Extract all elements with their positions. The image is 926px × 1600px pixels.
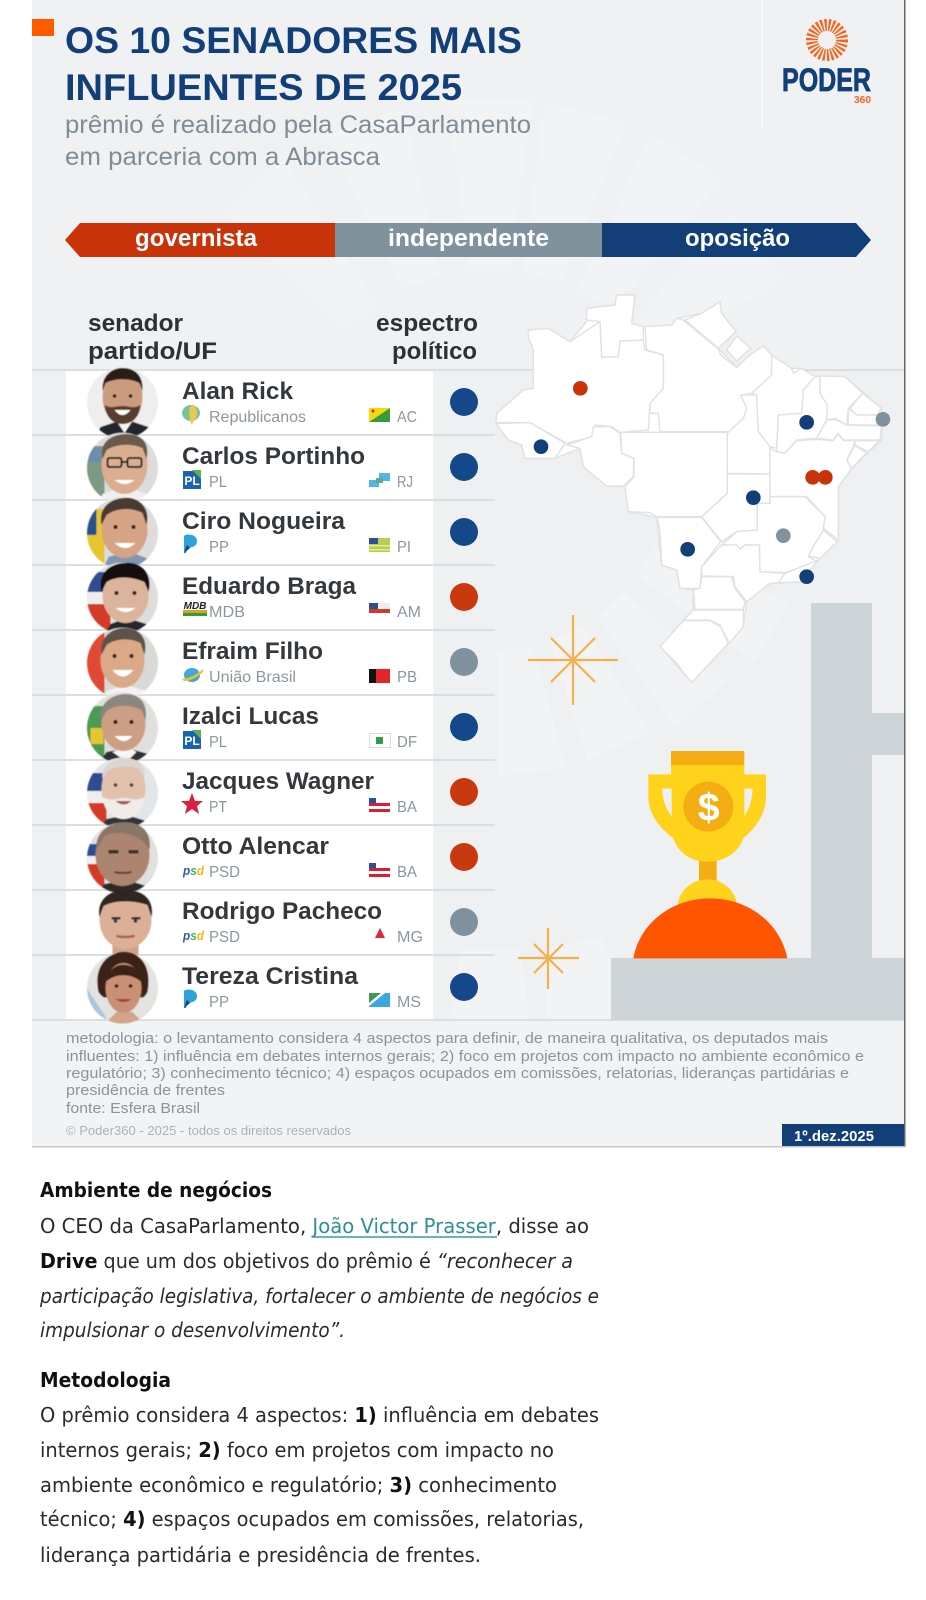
flag: Acre — [369, 408, 390, 422]
spectrum dot — [450, 973, 478, 1001]
name: Jacques Wagner — [182, 768, 374, 795]
logo: Poder360: 360 — [854, 95, 871, 106]
row: Otto Alencar — [86, 822, 478, 894]
flag: Distrito Federal — [370, 734, 390, 748]
paragraph: O CEO da CasaParlamento, João Victor Prasser, disse ao — [40, 1214, 589, 1238]
spectrum dot — [450, 713, 478, 741]
heading: Metodologia — [40, 1368, 171, 1392]
row: Eduardo Braga — [86, 562, 478, 634]
party: PT — [209, 799, 227, 816]
spectrum dot — [450, 583, 478, 611]
party logo: PP — [184, 989, 197, 1008]
paragraph: participação legislativa, fortalecer o ambiente de negócios e — [39, 1284, 599, 1308]
spectrum dot — [450, 908, 478, 936]
spectrum dot — [450, 648, 478, 676]
state: MG — [397, 929, 423, 946]
spectrum dot — [450, 518, 478, 546]
paragraph: liderança partidária e presidência de frentes. — [40, 1543, 481, 1567]
methodology note: presidência de frentes — [66, 1082, 225, 1099]
party logo: PP — [184, 534, 197, 553]
photo: Otto Alencar — [86, 822, 158, 894]
map of Brazil — [496, 295, 890, 683]
name: Ciro Nogueira — [182, 508, 346, 535]
photo: Carlos Portinho — [86, 432, 158, 504]
state: BA — [397, 799, 417, 816]
state: MS — [397, 994, 421, 1011]
photo: Eduardo Braga — [86, 562, 158, 634]
party: PP — [209, 539, 229, 556]
party logo: PSD: psd — [182, 863, 205, 878]
methodology note — [66, 1030, 864, 1117]
flag: Bahia — [369, 863, 390, 877]
paragraph: ambiente econômico e regulatório; 3) conhecimento — [40, 1473, 557, 1497]
party logo: PL: PL — [184, 734, 200, 748]
photo: Tereza Cristina — [86, 952, 158, 1024]
name: Tereza Cristina — [182, 963, 359, 990]
icon: small sparkle — [518, 928, 579, 989]
table row background and separators — [32, 369, 905, 1021]
icon: trophy with dollar coin: $ — [698, 786, 720, 830]
state: BA — [397, 864, 417, 881]
spectrum legend bar — [65, 223, 871, 257]
methodology note: fonte: Esfera Brasil — [66, 1100, 200, 1117]
name: Otto Alencar — [182, 833, 329, 860]
methodology note: regulatório; 3) conhecimento técnico; 4) espaços ocupados em comissões, relatorias, lideranças partidárias e — [66, 1065, 849, 1082]
article section: Metodologia — [40, 1368, 599, 1567]
row: Izalci Lucas — [86, 692, 478, 764]
party: PP — [209, 994, 229, 1011]
column headers: espectro — [376, 310, 478, 337]
column headers: senador — [88, 310, 183, 337]
name: Efraim Filho — [182, 638, 323, 665]
paragraph — [39, 1214, 599, 1342]
state: PB — [397, 669, 417, 686]
subtitle: prêmio é realizado pela CasaParlamento — [65, 111, 531, 139]
spectrum dot — [450, 453, 478, 481]
row: Alan Rick — [87, 368, 478, 439]
party logo: PT — [181, 793, 203, 814]
party logo: MDB — [183, 601, 207, 616]
party: Republicanos — [209, 409, 306, 426]
name: Eduardo Braga — [182, 573, 357, 600]
party: PSD — [209, 929, 240, 946]
map markers — [534, 381, 890, 584]
spectrum legend bar: oposição — [685, 225, 790, 252]
flag: Mato Grosso do Sul — [369, 993, 390, 1007]
party: União Brasil — [209, 669, 296, 686]
photo: Izalci Lucas — [86, 692, 158, 764]
party logo: PL: PL — [184, 474, 200, 488]
methodology note: metodologia: o levantamento considera 4 aspectos para definir, de maneira qualitativa, os deputados mais — [66, 1030, 828, 1047]
orange accent square — [32, 19, 54, 36]
row: Efraim Filho — [86, 627, 478, 699]
icon: large sparkle — [528, 615, 618, 705]
subtitle — [65, 111, 531, 171]
spectrum dot — [450, 388, 478, 416]
name: Izalci Lucas — [182, 703, 319, 730]
row: Carlos Portinho — [86, 432, 478, 504]
name: Alan Rick — [182, 378, 294, 405]
paragraph: Drive que um dos objetivos do prêmio é “reconhecer a — [40, 1249, 573, 1273]
party: PL — [209, 474, 227, 491]
article section: Ambiente de negócios — [39, 1178, 599, 1342]
subtitle: em parceria com a Abrasca — [65, 143, 380, 171]
column headers: político — [392, 338, 477, 365]
methodology note: influentes: 1) influência em debates internos gerais; 2) foco em projetos com impacto no ambiente econômico e — [66, 1048, 864, 1065]
title — [65, 20, 522, 108]
state: DF — [397, 734, 417, 751]
date tag: 1º.dez.2025 — [794, 1128, 874, 1145]
building silhouette — [611, 603, 905, 1020]
name: Rodrigo Pacheco — [182, 898, 382, 925]
party logo: PL — [183, 730, 201, 749]
photo: Ciro Nogueira — [86, 498, 158, 569]
state: AC — [397, 409, 417, 426]
title: OS 10 SENADORES MAIS — [65, 20, 522, 61]
date tag — [782, 1124, 905, 1146]
title: INFLUENTES DE 2025 — [65, 67, 462, 108]
name: Carlos Portinho — [182, 443, 365, 470]
spectrum dot — [450, 778, 478, 806]
state: PI — [397, 539, 411, 556]
paragraph: técnico; 4) espaços ocupados em comissões, relatorias, — [40, 1507, 584, 1531]
party logo: PSD: psd — [182, 928, 205, 943]
party logo: União Brasil — [182, 668, 203, 682]
state: RJ — [397, 474, 413, 491]
state: AM — [397, 604, 421, 621]
spectrum legend bar: independente — [388, 225, 549, 252]
photo: Efraim Filho — [86, 627, 158, 699]
heading: Ambiente de negócios — [40, 1178, 272, 1202]
spectrum legend bar: governista — [135, 225, 258, 252]
flag: Bahia — [369, 798, 390, 812]
column headers: partido/UF — [88, 338, 217, 365]
party logo: PL — [183, 470, 201, 489]
party: MDB — [209, 604, 245, 621]
panel edges — [32, 0, 906, 1148]
spectrum dot — [450, 843, 478, 871]
party: PL — [209, 734, 227, 751]
column headers — [88, 310, 478, 365]
logo: Poder360: PODER — [782, 62, 871, 98]
row: Jacques Wagner — [86, 758, 478, 829]
party logo: Republicanos — [182, 405, 200, 425]
photo: Jacques Wagner — [86, 758, 158, 829]
logo: Poder360 — [762, 0, 871, 130]
row: Rodrigo Pacheco — [99, 890, 478, 955]
copyright: © Poder360 - 2025 - todos os direitos reservados — [66, 1123, 351, 1138]
panel: background with rays — [32, 0, 905, 1170]
paragraph — [40, 1403, 599, 1567]
flag: Amazonas — [369, 603, 390, 613]
party logo: MDB: MDB — [184, 601, 206, 612]
flag: Piauí — [369, 538, 390, 552]
flag: Paraíba — [369, 669, 390, 683]
paragraph: O prêmio considera 4 aspectos: 1) influência em debates — [40, 1403, 599, 1427]
flag: Minas Gerais — [375, 928, 385, 938]
paragraph: impulsionar o desenvolvimento”. — [40, 1318, 345, 1342]
row: Tereza Cristina — [86, 952, 478, 1024]
icon: trophy with dollar coin — [633, 751, 787, 958]
row: Ciro Nogueira — [86, 498, 478, 569]
photo: Alan Rick — [87, 368, 158, 439]
paragraph: internos gerais; 2) foco em projetos com impacto no — [40, 1438, 554, 1462]
flag: Rio de Janeiro — [369, 473, 390, 487]
photo: Rodrigo Pacheco — [99, 890, 152, 955]
party: PSD — [209, 864, 240, 881]
